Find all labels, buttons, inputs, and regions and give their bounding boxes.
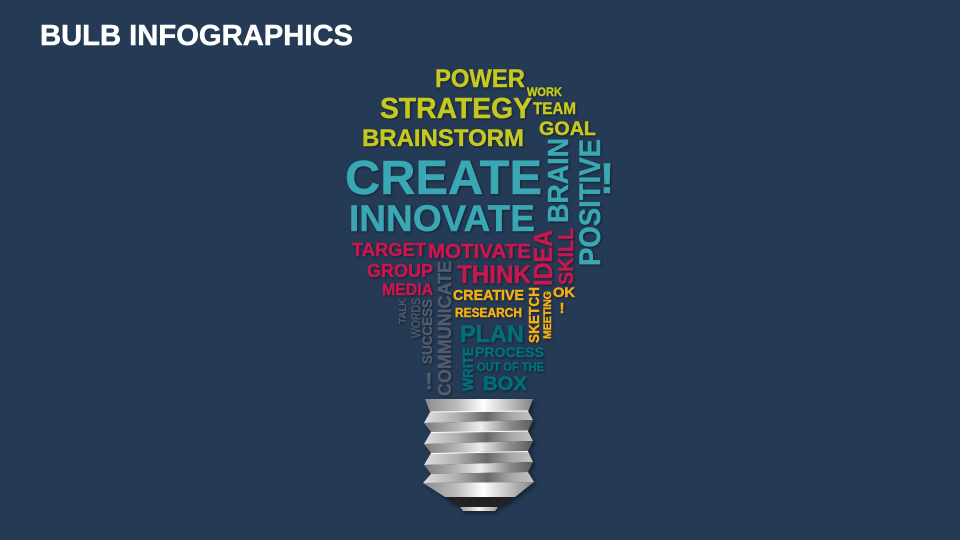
thread 1 bbox=[424, 411, 533, 432]
word: PROCESS: PROCESS bbox=[475, 344, 544, 360]
word group: crimson bbox=[352, 228, 578, 299]
thread 2 lower band bbox=[424, 441, 533, 453]
word: POWER: POWER bbox=[435, 65, 525, 93]
word: OUT OF THE: OUT OF THE bbox=[477, 360, 544, 374]
word: small exclamation mark: ! bbox=[560, 300, 564, 317]
icon: bulb screw base bbox=[423, 399, 534, 511]
word: SKETCH: SKETCH bbox=[526, 287, 543, 343]
word: BRAIN: BRAIN bbox=[543, 138, 575, 223]
thread 2 bbox=[424, 431, 533, 453]
word group: amber bbox=[453, 284, 575, 343]
word: CREATIVE: CREATIVE bbox=[453, 287, 524, 304]
word: BRAINSTORM: BRAINSTORM bbox=[362, 125, 524, 152]
word group: yellow-green bbox=[362, 65, 596, 152]
word: PLAN: PLAN bbox=[460, 321, 524, 348]
word: BOX: BOX bbox=[483, 373, 527, 395]
word: STRATEGY: STRATEGY bbox=[380, 93, 532, 125]
word: OK: OK bbox=[553, 284, 575, 300]
word: SKILL: SKILL bbox=[555, 228, 578, 285]
base: black insulator bbox=[445, 496, 515, 507]
word group: dark teal bbox=[460, 321, 544, 395]
thread 3 bbox=[424, 451, 533, 474]
word: POSITIVE: POSITIVE bbox=[574, 139, 607, 266]
base: lower shoulder bbox=[423, 482, 534, 497]
word: grey exclamation mark: ! bbox=[425, 368, 433, 394]
title: BULB INFOGRAPHICS bbox=[40, 20, 353, 52]
word cloud: bulb glass bbox=[345, 65, 614, 396]
thread 3 lower band bbox=[424, 462, 533, 474]
word group: teal bbox=[345, 138, 614, 266]
word: exclamation mark: ! bbox=[600, 155, 614, 203]
word: CREATE: CREATE bbox=[345, 152, 542, 205]
word: WORDS: WORDS bbox=[409, 298, 423, 338]
word: IDEA: IDEA bbox=[528, 230, 558, 286]
word: TARGET: TARGET bbox=[352, 240, 426, 260]
word: THINK: THINK bbox=[457, 261, 531, 289]
word: COMMUNICATE: COMMUNICATE bbox=[435, 261, 455, 396]
base: top collar bbox=[425, 399, 533, 412]
base: metal tip bbox=[460, 507, 498, 511]
thread 1 lower band bbox=[424, 420, 533, 432]
word: MEETING: MEETING bbox=[542, 291, 554, 339]
word: WORK: WORK bbox=[527, 87, 563, 99]
word group: slate grey bbox=[397, 261, 455, 396]
word: INNOVATE: INNOVATE bbox=[349, 198, 535, 239]
word: TEAM: TEAM bbox=[533, 100, 576, 118]
thread 3 upper band bbox=[424, 451, 533, 465]
word: GROUP: GROUP bbox=[367, 260, 433, 281]
thread 1 upper band bbox=[424, 411, 533, 423]
word: MOTIVATE: MOTIVATE bbox=[428, 240, 531, 263]
thread 2 upper band bbox=[424, 431, 533, 444]
thread 4 upper band bbox=[423, 472, 534, 483]
word: RESEARCH: RESEARCH bbox=[455, 306, 522, 320]
word: GOAL: GOAL bbox=[539, 118, 596, 140]
word: MEDIA: MEDIA bbox=[382, 281, 433, 299]
word: TALK: TALK bbox=[397, 299, 409, 324]
thread highlights bbox=[431, 411, 528, 454]
word: SUCCESS: SUCCESS bbox=[419, 299, 435, 364]
word: WRITE: WRITE bbox=[460, 347, 477, 391]
